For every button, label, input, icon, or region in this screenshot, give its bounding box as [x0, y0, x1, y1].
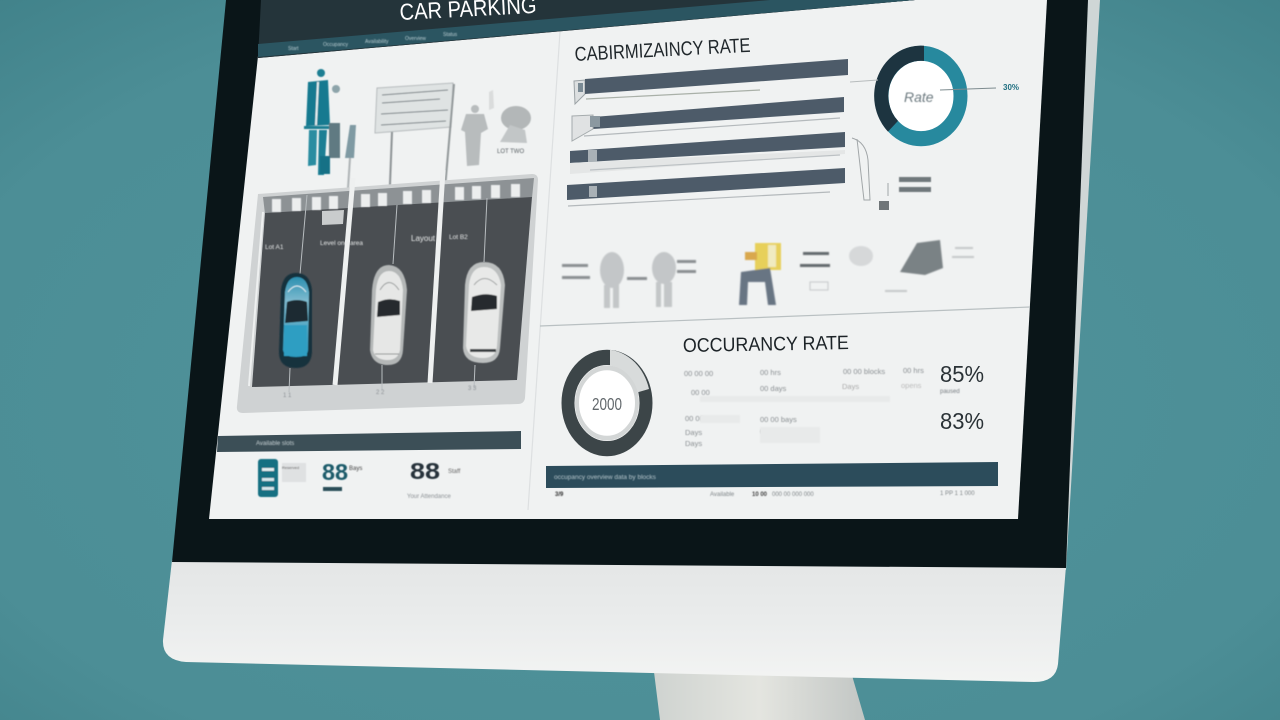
small sign on lot — [322, 210, 344, 225]
bay numbers: 3 3 — [468, 386, 477, 392]
data table: 00 hrs — [903, 366, 924, 375]
data table: 00 00 Hours — [760, 427, 801, 436]
icon: stat three: Staff — [448, 469, 461, 475]
data table: 00 days — [760, 384, 787, 393]
donut: occupancy — [568, 350, 649, 449]
navigation labels: Start — [288, 46, 299, 52]
percentage stats — [940, 361, 984, 434]
heading: OCCURANCY RATE — [683, 332, 849, 357]
stripe band — [263, 178, 534, 214]
donut label: Rate — [904, 89, 934, 105]
footer bar label: Available slots — [256, 441, 294, 447]
icon: stat two — [322, 459, 362, 491]
navigation labels: Occupancy — [323, 42, 349, 48]
footer text: 10 00 — [752, 492, 768, 498]
footer bar — [217, 431, 521, 452]
label text — [562, 260, 696, 280]
bar row 2 — [572, 97, 844, 141]
footer text — [555, 491, 975, 498]
lot labels: Lot B2 — [449, 234, 468, 241]
lane dividers — [249, 170, 487, 392]
data table: 00 00 — [685, 414, 704, 423]
data table: 00 00 00 — [684, 369, 713, 378]
lot labels: Level one area — [320, 240, 363, 247]
icon: grey car user — [497, 106, 531, 155]
icon: stat two: 88 — [322, 459, 348, 485]
monitor silver edge — [1054, 0, 1100, 570]
lot labels: Lot A1 — [265, 244, 284, 251]
navigation labels — [288, 32, 458, 52]
icon: dark vehicle — [900, 240, 943, 275]
percentage stats: 85% — [940, 361, 984, 387]
data table: 00 00 — [691, 388, 710, 397]
bay numbers: 1 1 — [283, 393, 292, 399]
parking surface — [252, 197, 532, 387]
bar rows — [567, 59, 848, 206]
heading: CABIRMIZAINCY RATE — [574, 35, 751, 66]
icon: stat three: 88 — [410, 458, 440, 484]
bay markers — [272, 184, 520, 212]
panel dividers — [528, 32, 1030, 510]
icon: stat one — [258, 459, 306, 497]
footer text: 000 00 000 000 — [772, 492, 814, 498]
icon caption: LOT TWO — [497, 149, 524, 155]
data table: opens — [901, 381, 922, 390]
bay numbers: 2 2 — [376, 390, 385, 396]
monitor stand — [654, 672, 865, 720]
label text — [810, 247, 974, 292]
bay numbers — [283, 386, 477, 399]
panel: capacity rate — [567, 35, 1019, 210]
icon: grey user — [849, 246, 873, 266]
footer text: Available — [710, 492, 735, 498]
footer text: 3/9 — [555, 492, 564, 498]
icon: grey people pair — [600, 252, 676, 308]
icon: yellow worker — [739, 243, 781, 305]
monitor bezel — [172, 0, 1088, 568]
data table: 00 00 blocks — [843, 367, 885, 376]
monitor chin — [163, 560, 1066, 682]
data table: 00 00 bays — [760, 415, 797, 424]
panel: parking illustration — [237, 69, 538, 413]
data table: Days — [685, 439, 702, 448]
navigation labels: Status — [443, 32, 458, 38]
icon: parking pole — [335, 125, 356, 385]
connector labels — [899, 177, 931, 192]
icon: stat two: Bays — [349, 466, 362, 472]
panel: left footer — [217, 431, 521, 500]
navigation labels: Availability — [365, 39, 389, 45]
percentage stats: paused — [940, 389, 960, 395]
bar row 4 — [567, 168, 845, 206]
connector bracket — [852, 138, 889, 210]
signboard — [375, 83, 454, 210]
data table — [684, 366, 924, 448]
footer text: 1 PP 1 1 000 — [940, 491, 975, 497]
icon: stat one: Reserved — [282, 465, 299, 470]
leader line and value: 30% — [1003, 83, 1019, 92]
data table: Days — [685, 428, 702, 437]
lot labels: Layout — [411, 234, 436, 243]
donut: capacity — [874, 46, 960, 139]
donut label: 2000 — [592, 395, 622, 414]
panel: people icons — [562, 240, 974, 308]
data table: 00 hrs — [760, 368, 781, 377]
screen header — [258, 0, 915, 58]
bar row 3 — [570, 132, 845, 174]
status bar — [546, 462, 998, 488]
label text — [800, 252, 830, 267]
data table: Days — [842, 382, 859, 391]
panel: occupancy rate — [546, 332, 998, 498]
icon: stat three — [407, 458, 461, 500]
icon: teal attendant figure — [304, 69, 340, 175]
icon: grey person — [461, 90, 494, 166]
screen — [209, 0, 1047, 519]
car: silver middle — [370, 265, 407, 365]
faint table rows — [700, 396, 890, 443]
navigation labels: Overview — [405, 36, 426, 42]
percentage stats: 83% — [940, 408, 984, 434]
parking lot frame — [237, 174, 538, 413]
car: blue — [279, 273, 312, 368]
lot labels — [265, 234, 468, 251]
car: silver right — [463, 262, 505, 363]
icon: stat three: Your Attendance — [407, 494, 451, 500]
bar row 1 — [574, 59, 848, 104]
status bar text: occupancy overview data by blocks — [554, 474, 657, 481]
